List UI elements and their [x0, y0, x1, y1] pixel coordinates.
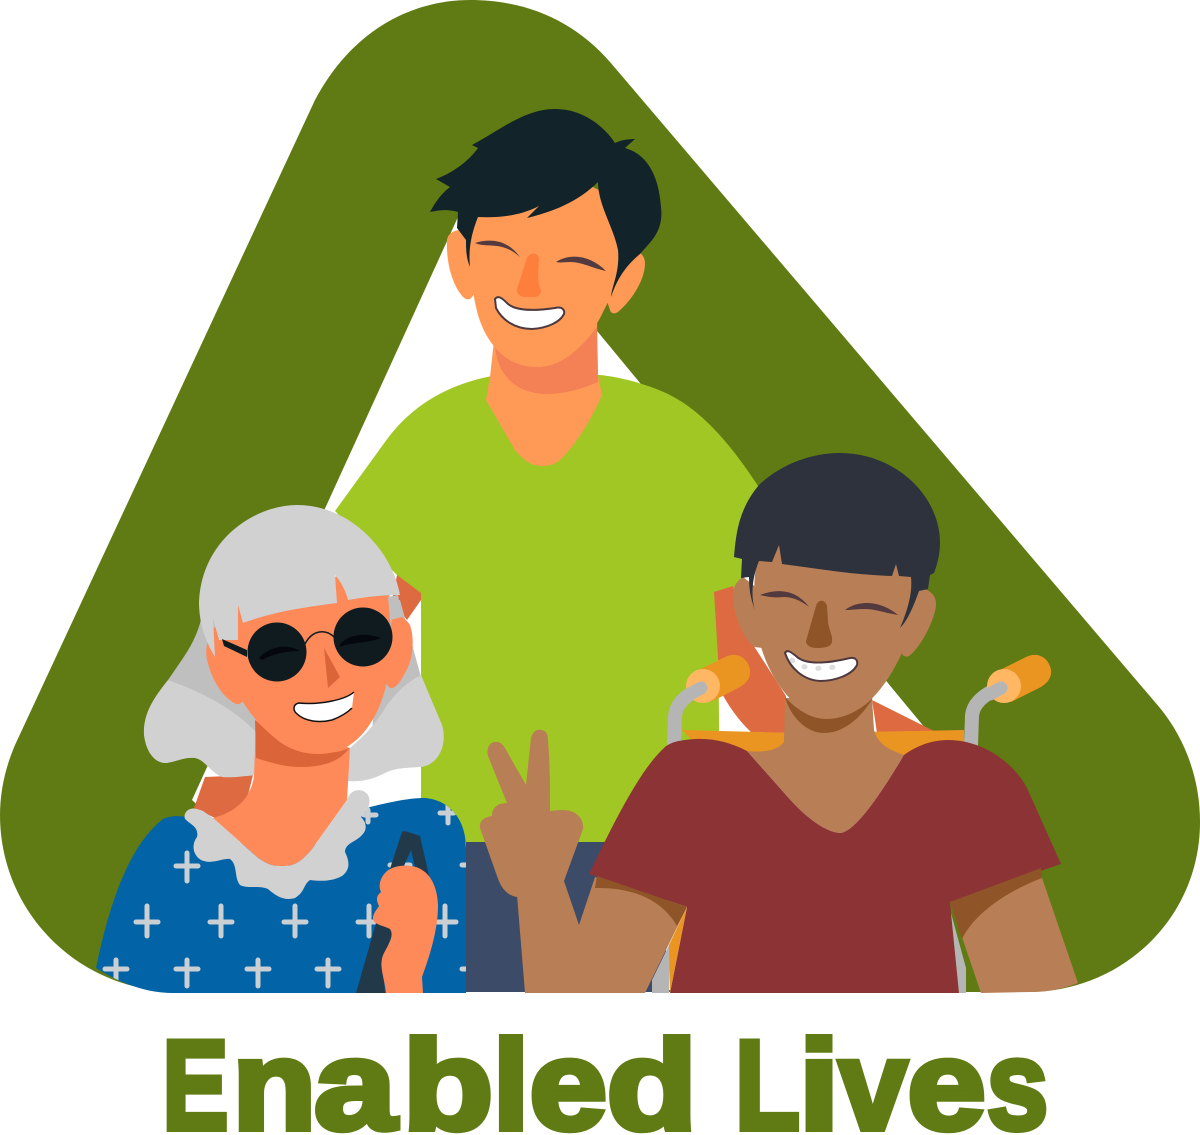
- neck shadow: [255, 720, 349, 767]
- neck: [747, 698, 904, 833]
- wheelchair handles: [674, 655, 1051, 745]
- neck shadow: [495, 327, 598, 394]
- hair: [430, 109, 661, 297]
- face: [754, 530, 911, 717]
- hair lobes: [144, 675, 444, 781]
- back hair shadow: [168, 600, 421, 735]
- person: man in green shirt: [335, 109, 762, 992]
- eyebrows: [760, 591, 898, 615]
- smile: [294, 692, 354, 722]
- smile: [495, 297, 564, 329]
- collar: [184, 790, 370, 899]
- hair cap: [199, 505, 400, 657]
- sunglasses: [222, 608, 392, 682]
- ears: [447, 230, 476, 299]
- smile with braces: [785, 651, 857, 681]
- chair headrest: [194, 575, 421, 818]
- raised arm and peace hand: [480, 730, 687, 993]
- right arm: [950, 868, 1078, 993]
- chair frame strips left: [652, 943, 670, 993]
- eyebrows: [475, 241, 606, 271]
- neck: [486, 320, 602, 466]
- neck: [213, 720, 350, 866]
- navy trousers: [466, 842, 666, 992]
- nose: [517, 254, 541, 297]
- ears: [206, 615, 413, 704]
- red shirt: [589, 739, 1061, 993]
- backrest bars: [682, 730, 964, 758]
- person: woman with sunglasses: [96, 505, 472, 993]
- hair side strand: [388, 595, 402, 620]
- white cane: [356, 831, 430, 993]
- hair: [734, 453, 940, 628]
- blouse crosses: [105, 805, 472, 986]
- person: wheelchair user in red shirt: [480, 453, 1078, 993]
- green shirt: [335, 375, 762, 842]
- backrest: [714, 586, 934, 733]
- neck shadow: [785, 697, 873, 733]
- ears: [733, 577, 936, 657]
- blue blouse: [96, 798, 466, 993]
- hand: [373, 866, 438, 993]
- face: [469, 170, 620, 367]
- nose: [324, 648, 340, 688]
- face: [224, 570, 390, 754]
- nose: [806, 601, 832, 648]
